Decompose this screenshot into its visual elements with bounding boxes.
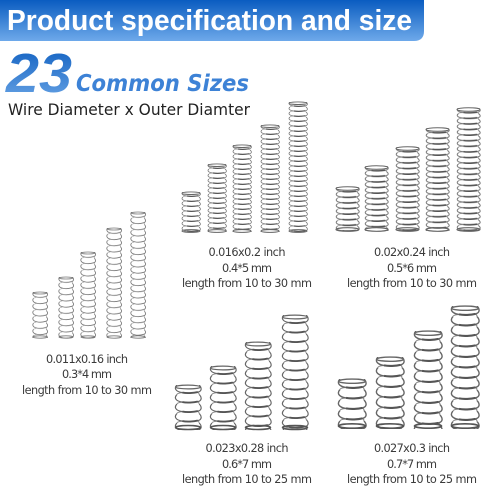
caption: 0.5*6 mm — [347, 246, 477, 290]
caption: 0.6*7 mm — [182, 442, 312, 486]
caption: 0.4*5 mm — [182, 246, 312, 290]
caption: 0.6*7 mm: length from 10 to 25 mm — [182, 473, 312, 486]
heading: 23 common sizes: 23 — [5, 42, 72, 104]
panel: 0.6*7 mm springs — [174, 315, 309, 430]
caption: 0.7*7 mm: 0.027x0.3 inch — [374, 442, 450, 455]
caption: 0.7*7 mm — [347, 442, 477, 486]
caption: 0.6*7 mm: 0.6*7 mm — [222, 458, 272, 471]
caption: 0.3*4 mm: 0.3*4 mm — [62, 368, 112, 381]
caption: 0.6*7 mm: 0.023x0.28 inch — [206, 442, 288, 455]
caption: 0.5*6 mm: 0.5*6 mm — [387, 262, 437, 275]
caption: 0.4*5 mm: length from 10 to 30 mm — [182, 277, 312, 290]
heading: 23 common sizes: Common Sizes — [76, 71, 249, 97]
caption: 0.7*7 mm: length from 10 to 25 mm — [347, 473, 477, 486]
title banner: Product specification and size — [7, 5, 412, 37]
caption: 0.4*5 mm: 0.016x0.2 inch — [208, 246, 286, 259]
caption: 0.3*4 mm — [22, 353, 152, 397]
caption: 0.5*6 mm: 0.02x0.24 inch — [374, 246, 450, 259]
panel: 0.3*4 mm springs — [32, 212, 146, 338]
caption: 0.7*7 mm: 0.7*7 mm — [387, 458, 437, 471]
panel: 0.5*6 mm springs — [335, 108, 481, 231]
subheading: Wire Diameter x Outer Diamter — [8, 100, 250, 119]
caption: 0.4*5 mm: 0.4*5 mm — [222, 262, 272, 275]
panel: 0.4*5 mm springs — [181, 102, 308, 232]
panel: 0.7*7 mm springs — [337, 306, 480, 429]
heading: 23 common sizes — [5, 42, 249, 104]
caption: 0.3*4 mm: length from 10 to 30 mm — [22, 384, 152, 397]
caption: 0.5*6 mm: length from 10 to 30 mm — [347, 277, 477, 290]
caption: 0.3*4 mm: 0.011x0.16 inch — [46, 353, 128, 366]
